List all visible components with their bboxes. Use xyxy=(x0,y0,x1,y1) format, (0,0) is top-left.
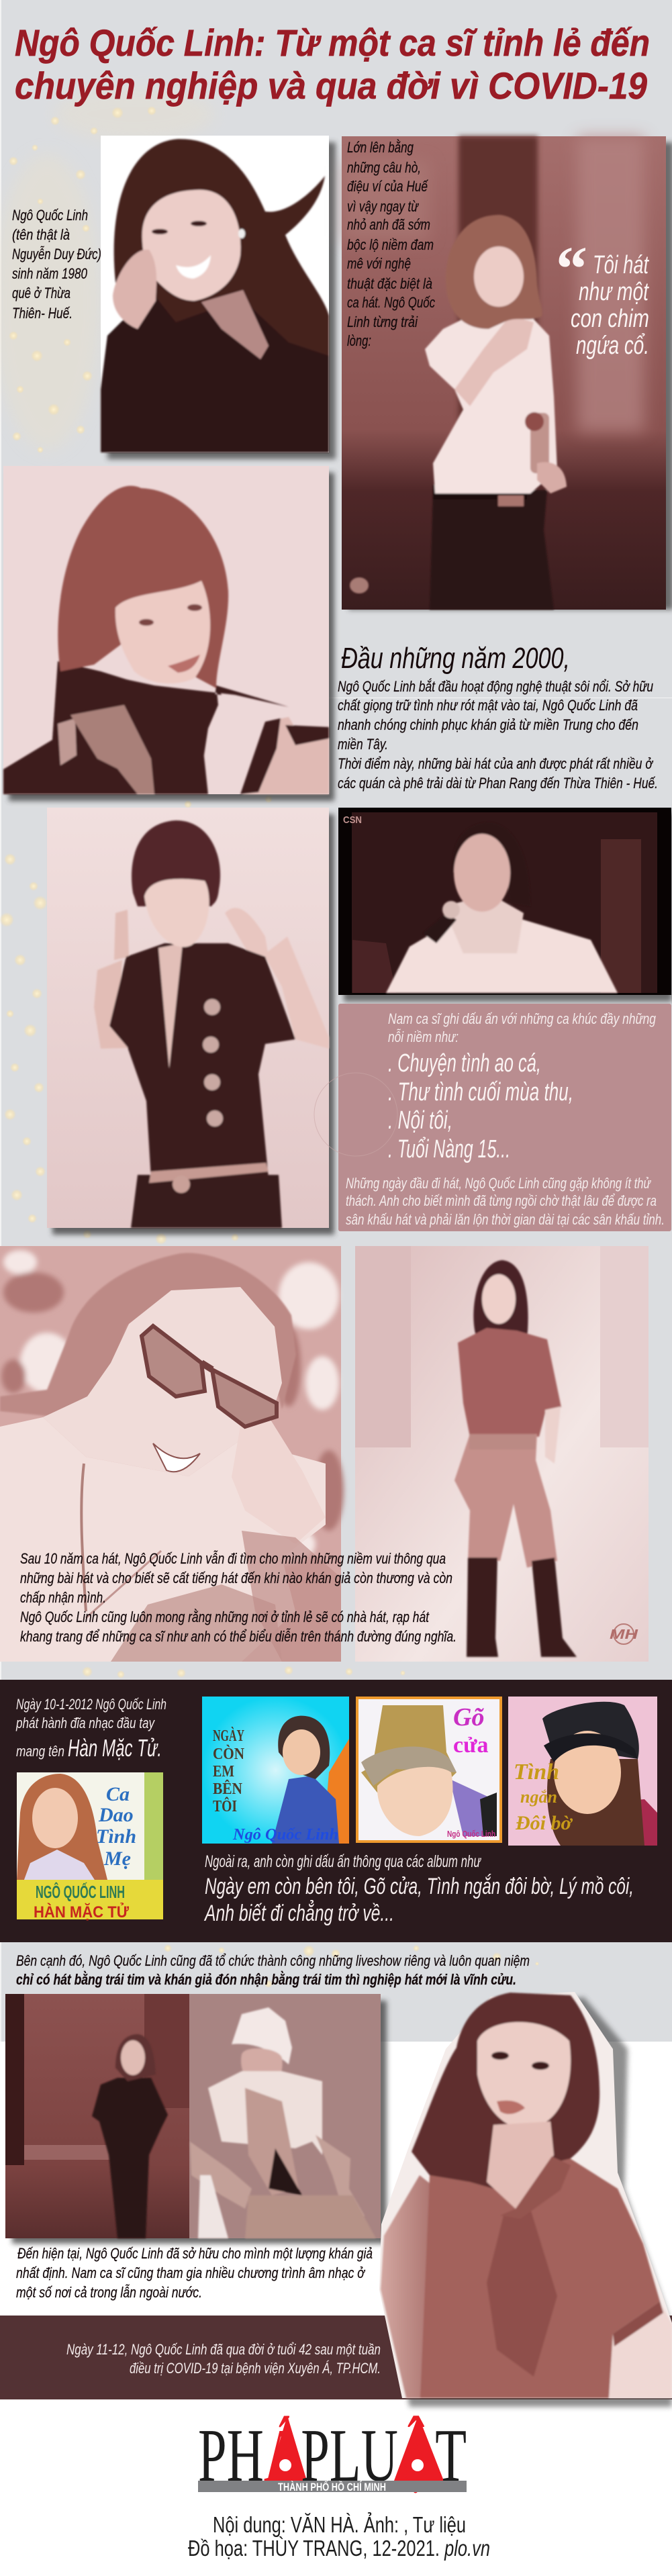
album cover: Ngày còn em bên tôi: NGÀY xyxy=(213,1727,244,1745)
intro text: sinh năm 1980 xyxy=(12,265,88,282)
song list xyxy=(388,1049,573,1163)
overlay text: after ten years: những bài hát và cho biết sẽ cất tiếng hát đến khi nào khán giả còn thương và còn xyxy=(20,1570,452,1586)
photo: large cut-out portrait xyxy=(379,1992,672,2407)
album cover: Tình ngắn đôi bờ: ngắn xyxy=(520,1787,557,1807)
stage text: Lớn lên bằng xyxy=(347,139,414,156)
other albums text: Ngoài ra, anh còn ghi dấu ấn thông qua các album như xyxy=(205,1852,481,1871)
panel: songs xyxy=(314,1004,671,1231)
paragraph: early 2000s xyxy=(338,678,658,792)
panel intro: nỗi niềm như: xyxy=(388,1029,459,1045)
panel closing paragraph xyxy=(346,1175,665,1228)
notice text: Ngày 11-12, Ngô Quốc Linh đã qua đời ở tuổi 42 sau một tuần xyxy=(66,2341,381,2358)
overlay text: after ten years: Sau 10 năm ca hát, Ngô Quốc Linh vẫn đi tìm cho mình những niềm vui thông qua xyxy=(20,1550,446,1567)
stage text: điệu ví của Huế xyxy=(347,178,428,195)
album cover: Ca Dao Tình Mẹ: Ca xyxy=(106,1783,130,1805)
intro text: (tên thật là xyxy=(12,226,70,243)
channel watermark: CSN xyxy=(343,814,362,826)
stage text: lòng: xyxy=(347,332,371,349)
intro text: Thiên- Huế. xyxy=(12,305,73,322)
stage text: những câu hò, xyxy=(347,159,421,176)
quote: Tôi hát xyxy=(593,251,649,279)
song list: . Tuổi Nàng 15... xyxy=(388,1135,510,1163)
album cover: Gõ cửa xyxy=(356,1697,502,1843)
debut album text: phát hành đĩa nhạc đầu tay xyxy=(15,1715,156,1731)
album cover: Gõ cửa: Gõ xyxy=(453,1703,484,1731)
paragraph: early 2000s: miền Tây. xyxy=(338,736,388,753)
quote xyxy=(556,234,649,360)
credits xyxy=(188,2512,490,2561)
credits: Đồ họa: THÙY TRANG, 12-2021. plo.vn xyxy=(188,2536,490,2561)
title xyxy=(15,21,650,107)
intro text xyxy=(12,207,101,322)
album cover: Gõ cửa: Ngô Quốc Linh xyxy=(447,1829,495,1839)
passing notice band xyxy=(0,2316,672,2399)
song list: . Chuyện tình ao cá, xyxy=(388,1049,541,1078)
overlay text: after ten years: khang trang để những ca sĩ như anh có thể biểu diễn trên thánh đường đúng nghĩa. xyxy=(20,1628,457,1645)
stage text: nhỏ anh đã sớm xyxy=(347,216,430,233)
credits: Nội dung: VĂN HÀ. Ảnh: , Tư liệu xyxy=(213,2512,466,2537)
photo: posing in black shirt xyxy=(47,808,334,1235)
album cover: Tình ngắn đôi bờ: Đôi bờ xyxy=(515,1812,573,1834)
album cover: Ca Dao Tình Mẹ: NGÔ QUỐC LINH xyxy=(36,1882,125,1902)
overlay text: after ten years: chấp nhận mình. xyxy=(20,1589,106,1606)
intro text: quê ở Thừa xyxy=(12,285,70,301)
quote: như một xyxy=(579,278,649,306)
overlay text: after ten years: Ngô Quốc Linh cũng luôn mong rằng những nơi ở tỉnh lẻ sẽ có nhà hát, rạp hát xyxy=(20,1609,430,1625)
present-day text: nhất định. Nam ca sĩ cũng tham gia nhiều chương trình âm nhạc ở xyxy=(16,2264,365,2281)
album cover: Ca Dao Tình Mẹ xyxy=(17,1772,163,1921)
stage text: ca hát. Ngô Quốc xyxy=(347,294,435,311)
heading: early 2000s: Đầu những năm 2000, xyxy=(341,642,570,675)
quote: “ xyxy=(556,234,587,304)
intro text: Ngô Quốc Linh xyxy=(12,207,88,224)
stage text: bộc lộ niềm đam xyxy=(347,236,434,253)
quote: con chim xyxy=(571,305,649,333)
present-day text: Đến hiện tại, Ngô Quốc Linh đã sở hữu cho mình một lượng khán giả xyxy=(17,2245,373,2262)
album cover: Ngày còn em bên tôi: CÒN xyxy=(213,1745,245,1763)
album cover: Ngày còn em bên tôi: EM xyxy=(213,1763,234,1780)
stage text: vì vậy ngay từ xyxy=(347,198,420,215)
album cover: Tình ngắn đôi bờ xyxy=(508,1697,657,1846)
album cover: Ca Dao Tình Mẹ: HÀN MẶC TỬ xyxy=(34,1902,129,1921)
album cover: Ca Dao Tình Mẹ: Tình xyxy=(96,1825,136,1848)
photo: singer on stage xyxy=(342,136,672,610)
MH studio mark: MH xyxy=(610,1627,638,1642)
notice text xyxy=(66,2341,381,2377)
photo: full-length standing portrait xyxy=(355,1246,649,1662)
album cover: Tình ngắn đôi bờ: Tình xyxy=(514,1760,559,1784)
intro text: Nguyễn Duy Đức) xyxy=(12,246,101,263)
photo pair: stage and white hat xyxy=(5,1994,387,2244)
present-day text xyxy=(16,2245,373,2301)
album cover: Gõ cửa: cửa xyxy=(453,1733,489,1758)
debut album text: Ngày 10-1-2012 Ngô Quốc Linh xyxy=(16,1696,166,1713)
liveshow text: chỉ có hát bằng trái tim và khán giả đón nhận bằng trái tim thì nghiệp hát mới là vĩnh cửu. xyxy=(16,1971,516,1988)
debut album text xyxy=(15,1696,166,1762)
debut album text: mang tên xyxy=(16,1743,64,1760)
notice text: điều trị COVID-19 tại bệnh viện Xuyên Á, TP.HCM. xyxy=(130,2360,381,2377)
album cover: Ngày còn em bên tôi: Ngô Quốc Linh xyxy=(232,1826,338,1844)
stage text: thuật đặc biệt là xyxy=(347,275,432,292)
stage text xyxy=(347,139,435,349)
overlay text: after ten years xyxy=(20,1550,457,1645)
liveshow text: Bên cạnh đó, Ngô Quốc Linh cũng đã tổ chức thành công những liveshow riêng và luôn quan niệm xyxy=(16,1952,530,1969)
background sparkles xyxy=(0,87,539,1988)
photo: sunglasses portrait xyxy=(0,1246,344,1662)
dark albums band xyxy=(0,1680,672,1942)
logo: Pháp Luật: THÀNH PHỐ HỒ CHÍ MINH xyxy=(278,2480,386,2493)
album cover: Ngày còn em bên tôi xyxy=(202,1697,349,1844)
liveshow text xyxy=(16,1952,530,1988)
song list: . Nội tôi, xyxy=(388,1106,452,1135)
photo: close-up portrait xyxy=(3,466,334,801)
album cover: Ngày còn em bên tôi: BÊN xyxy=(213,1780,243,1798)
song list: . Thư tình cuối mùa thu, xyxy=(388,1078,573,1106)
album cover: Ngày còn em bên tôi: TÔI xyxy=(213,1797,237,1815)
photo: video still with white jacket xyxy=(338,808,672,1002)
album cover: Ca Dao Tình Mẹ: Mẹ xyxy=(103,1848,131,1870)
stage text: mê với nghệ xyxy=(347,255,411,272)
debut album text: Hàn Mặc Tử. xyxy=(68,1734,162,1762)
present-day text: một số nơi cả trong lẫn ngoài nước. xyxy=(16,2284,202,2301)
logo: Pháp Luật: PHÁPLUẬT xyxy=(198,2414,467,2497)
other albums text: Anh biết đi chẳng trở về... xyxy=(204,1901,394,1926)
MH studio mark xyxy=(610,1624,638,1644)
other albums text xyxy=(204,1852,634,1926)
stage text: Linh từng trải xyxy=(347,314,418,330)
panel intro xyxy=(388,1010,657,1045)
photo: portrait with flowing hair xyxy=(101,136,336,459)
album cover: Ca Dao Tình Mẹ: Dao xyxy=(98,1804,134,1826)
